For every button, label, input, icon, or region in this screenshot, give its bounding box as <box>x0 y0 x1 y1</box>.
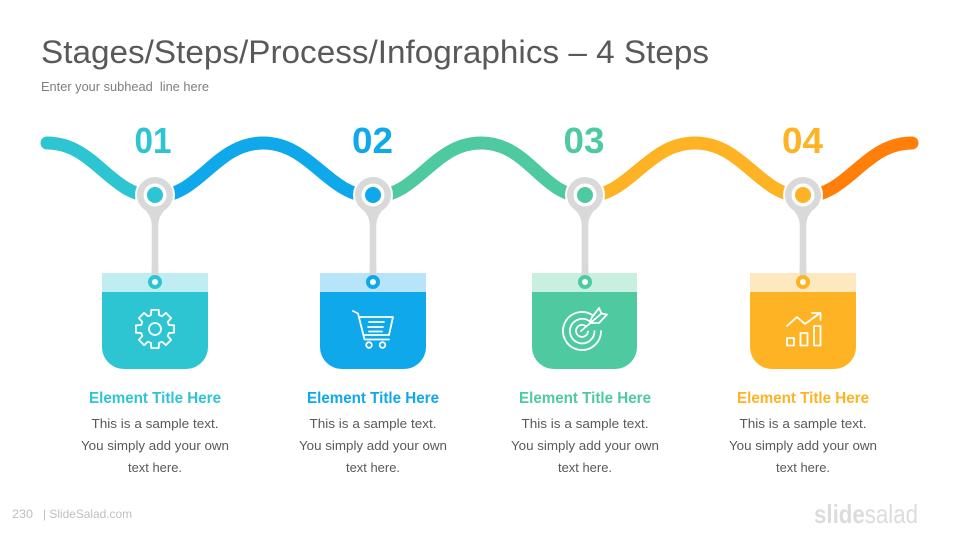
step 2 <box>299 120 447 475</box>
body text 2: text here. <box>346 460 400 475</box>
body text 4: text here. <box>776 460 830 475</box>
title: Stages/Steps/Process/Infographics – 4 Steps <box>41 34 709 70</box>
body text 1: text here. <box>128 460 182 475</box>
footer brand text: | SlideSalad.com <box>43 507 132 521</box>
pin 2 <box>353 175 393 273</box>
icon: gear <box>136 310 174 348</box>
body text 4: This is a sample text. <box>740 416 866 431</box>
icon: growth chart <box>787 313 820 346</box>
pin 4 <box>783 175 823 273</box>
body text 2: You simply add your own <box>299 438 447 453</box>
body text 3: This is a sample text. <box>522 416 648 431</box>
body text 4: You simply add your own <box>729 438 877 453</box>
body text 3: You simply add your own <box>511 438 659 453</box>
card 3 <box>532 268 637 369</box>
element title 2: Element Title Here <box>307 390 439 407</box>
body text 1: You simply add your own <box>81 438 229 453</box>
card 4 <box>750 268 856 369</box>
step 4 <box>729 120 877 475</box>
logo: slidesalad <box>814 499 918 529</box>
number 01: 01 <box>134 120 172 161</box>
body text 4 <box>729 416 877 475</box>
body text 3: text here. <box>558 460 612 475</box>
body text 1: This is a sample text. <box>92 416 218 431</box>
step 3 <box>511 120 659 475</box>
number 02: 02 <box>352 120 393 161</box>
element title 1: Element Title Here <box>89 390 221 407</box>
body text 3 <box>511 416 659 475</box>
page number: 230 <box>12 507 33 521</box>
pin 3 <box>565 175 605 273</box>
number 04: 04 <box>782 120 823 161</box>
subhead: Enter your subhead line here <box>41 79 209 94</box>
step 1 <box>81 120 229 475</box>
element title 4: Element Title Here <box>737 390 869 407</box>
icon: target with arrow <box>563 308 607 350</box>
pin 1 <box>135 175 175 273</box>
element title 3: Element Title Here <box>519 390 651 407</box>
card 1 <box>102 268 208 369</box>
wavy timeline <box>47 143 912 196</box>
icon: shopping cart <box>353 311 393 348</box>
card 2 <box>320 268 426 369</box>
body text 1 <box>81 416 229 475</box>
body text 2: This is a sample text. <box>310 416 436 431</box>
body text 2 <box>299 416 447 475</box>
number 03: 03 <box>564 120 604 161</box>
